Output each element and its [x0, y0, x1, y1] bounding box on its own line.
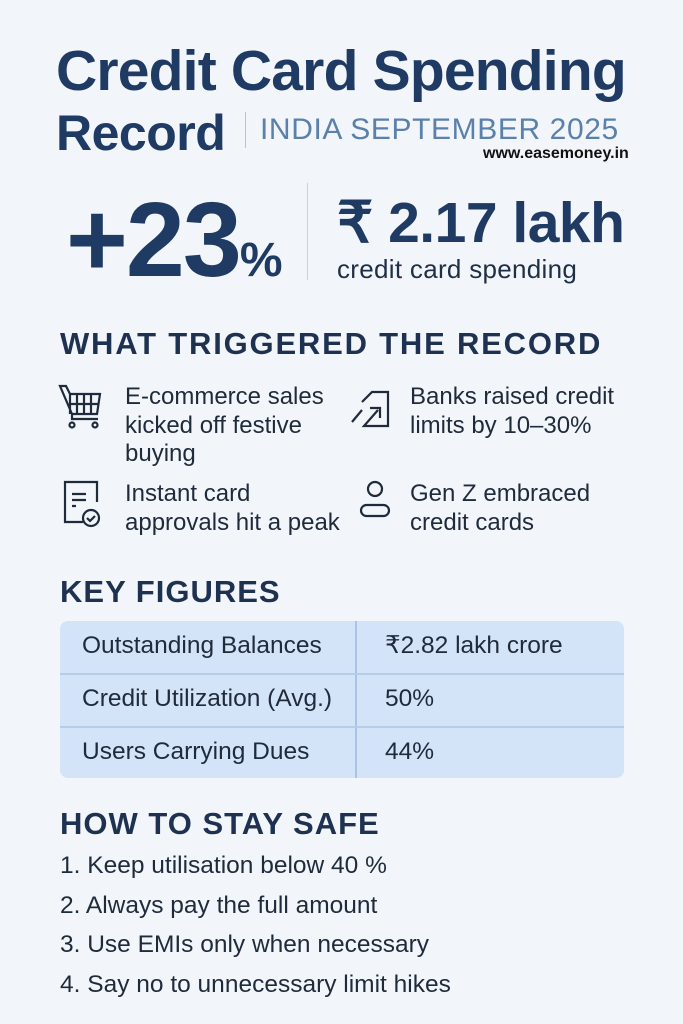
safety list: 1. Keep utilisation below 40 % — [60, 852, 387, 879]
title line 2: Record — [56, 105, 225, 161]
icon: person — [360, 480, 390, 518]
safety list: 2. Always pay the full amount — [60, 892, 377, 918]
safety list — [60, 852, 451, 998]
row: dues: Users Carrying Dues — [82, 738, 309, 765]
safety list: 3. Use EMIs only when necessary — [60, 931, 429, 958]
stat: spending: credit card spending — [337, 254, 577, 284]
trigger: gen z: credit cards — [410, 508, 534, 536]
table: key figures: 50% — [385, 685, 434, 712]
subtitle: INDIA SEPTEMBER 2025 — [260, 113, 619, 146]
trigger: approvals: approvals hit a peak — [125, 508, 340, 536]
trigger: ecommerce: buying — [125, 440, 196, 467]
stat: spending — [337, 191, 624, 284]
trigger: approvals — [64, 480, 340, 536]
row: utilization: Credit Utilization (Avg.) — [82, 685, 332, 712]
trigger: gen z — [360, 480, 590, 536]
trigger: limits: limits by 10–30% — [410, 412, 591, 438]
safety list: 4. Say no to unnecessary limit hikes — [60, 970, 451, 998]
heading: key figures: KEY FIGURES — [60, 574, 281, 609]
trigger: ecommerce — [58, 383, 324, 467]
heading: triggers: WHAT TRIGGERED THE RECORD — [60, 326, 602, 361]
trigger: gen z: Gen Z embraced — [410, 480, 590, 507]
title line 1: Credit Card Spending — [56, 39, 626, 103]
trigger: approvals: Instant card — [125, 480, 250, 507]
trigger: ecommerce: E-commerce sales — [125, 383, 324, 410]
table: key figures — [60, 621, 624, 778]
icon: document check — [64, 480, 100, 528]
table: key figures: 44% — [385, 738, 434, 765]
icon: cart — [58, 384, 102, 429]
trigger: limits — [351, 383, 614, 438]
icon: limit up — [351, 390, 390, 428]
heading: stay safe: HOW TO STAY SAFE — [60, 806, 380, 841]
trigger: ecommerce: kicked off festive — [125, 412, 302, 438]
website: www.easemoney.in — [483, 145, 629, 162]
trigger: limits: Banks raised credit — [410, 383, 614, 410]
stat: spending: ₹ 2.17 lakh — [337, 191, 624, 255]
table: key figures: ₹2.82 lakh crore — [385, 632, 563, 659]
stat: growth: +23% — [66, 181, 282, 299]
row: outstanding: Outstanding Balances — [82, 632, 322, 659]
